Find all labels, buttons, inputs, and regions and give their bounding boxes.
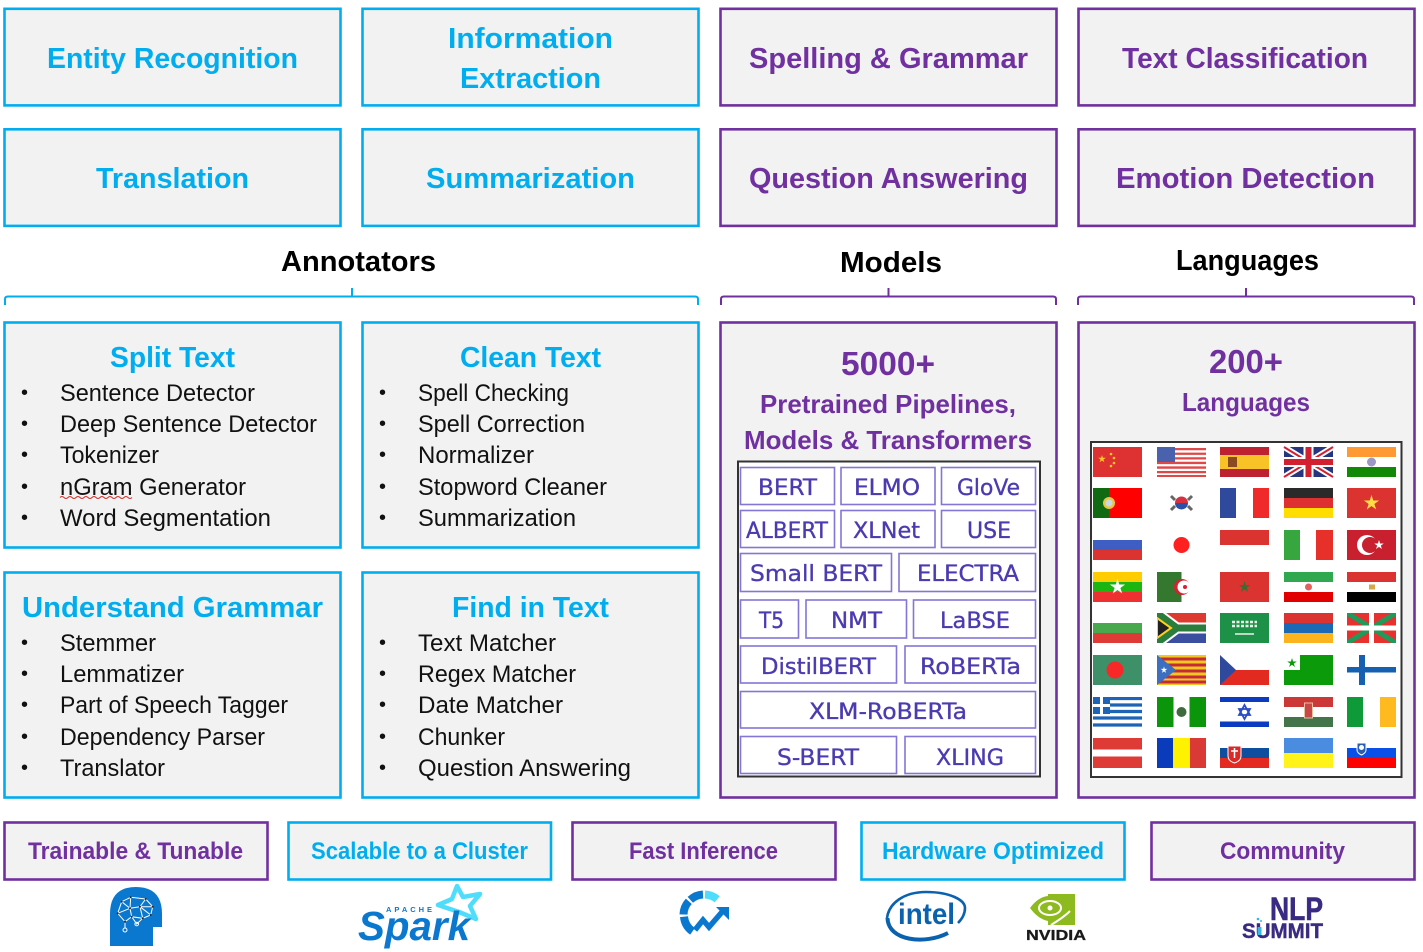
stat: 5000+: 5000+: [841, 345, 935, 382]
panel: Understand Grammar: [4, 572, 340, 798]
flag: Austria: [1093, 738, 1142, 768]
model grid: ALBERT: [746, 519, 829, 544]
heading: Annotators: Annotators: [281, 246, 436, 278]
list: Split Text items: •: [21, 413, 28, 435]
feature box: Fast Inference: [572, 822, 836, 880]
capability box: Question Answering: [720, 129, 1056, 226]
flag: Hungary: [1284, 697, 1333, 727]
model grid: XLM-RoBERTa: [809, 700, 967, 725]
flag: Morocco: [1220, 572, 1269, 602]
icon: NLP Summit logo: NLP: [1270, 891, 1323, 927]
capability box: Summarization: [362, 129, 698, 226]
model grid: RoBERTa: [920, 655, 1021, 680]
capability box: Information Extraction: Extraction: [460, 63, 601, 95]
list: Clean Text items: •: [379, 444, 386, 466]
heading: Languages: Languages: [1176, 245, 1319, 277]
list: Understand Grammar items: Part of Speech Tagger: [60, 692, 288, 719]
list: Find in Text items: •: [379, 726, 386, 748]
list: Find in Text items: •: [379, 757, 386, 779]
model grid: USE: [967, 519, 1011, 544]
flag: India: [1347, 447, 1396, 477]
list: Find in Text items: •: [379, 663, 386, 685]
capability box: Text Classification: [1078, 9, 1414, 105]
feature box: Community: [1152, 822, 1414, 880]
model grid: ELECTRA: [917, 562, 1019, 587]
list: Clean Text items: Spell Correction: [418, 411, 585, 438]
flag: China: [1093, 447, 1142, 477]
stat: 200+: 200+: [1209, 343, 1283, 380]
capability box: Spelling & Grammar: Spelling & Grammar: [749, 43, 1028, 75]
capability box: Question Answering: Question Answering: [749, 163, 1028, 195]
list: Clean Text items: Summarization: [418, 505, 576, 532]
bracket: Languages: [1078, 288, 1414, 305]
flag: Nigeria: [1157, 697, 1206, 727]
feature box: Scalable to a Cluster: Scalable to a Cluster: [311, 838, 528, 865]
list: Find in Text items: Chunker: [418, 724, 505, 751]
list: Understand Grammar items: Dependency Parser: [60, 724, 265, 751]
icon: AI head with neural network: [110, 887, 162, 946]
flag: Ukraine: [1284, 738, 1333, 768]
panel: Find in Text: [362, 572, 698, 798]
flag: Turkey: [1347, 530, 1396, 560]
flag: Basque Country: [1347, 613, 1396, 643]
list: Split Text items: Sentence Detector: [60, 380, 255, 407]
feature box: Community: Community: [1220, 838, 1346, 865]
capability box: Translation: [4, 129, 340, 226]
capability box: Text Classification: Text Classification: [1122, 43, 1368, 75]
list: Clean Text items: •: [379, 413, 386, 435]
icon: Apache Spark logo: Spark: [358, 903, 472, 949]
model grid: XLNet: [853, 519, 920, 544]
subheading: Pretrained Pipelines, Models & Transformers: [744, 389, 1032, 455]
list: Understand Grammar items: •: [21, 694, 28, 716]
flag: Indonesia: [1220, 530, 1269, 560]
list: Understand Grammar items: •: [21, 757, 28, 779]
subheading: Pretrained Pipelines, Models & Transformers: Pretrained Pipelines,: [760, 389, 1016, 419]
list: Split Text items: Tokenizer: [60, 442, 159, 469]
flag: Russia: [1093, 530, 1142, 560]
list: Find in Text items: •: [379, 632, 386, 654]
list: Clean Text items: •: [379, 507, 386, 529]
feature box: Fast Inference: Fast Inference: [629, 838, 778, 865]
subheading: Languages: Languages: [1182, 387, 1310, 417]
subheading: Pretrained Pipelines, Models & Transformers: Models & Transformers: [744, 425, 1032, 455]
list: Clean Text items: Stopword Cleaner: [418, 474, 607, 501]
model grid: BERT: [758, 476, 818, 501]
flag: France: [1220, 488, 1269, 518]
flag: Slovakia: [1220, 738, 1269, 768]
model grid: XLING: [936, 746, 1004, 771]
flag: Bulgaria: [1093, 613, 1142, 643]
icon: Apache Spark logo: APACHE: [386, 905, 432, 914]
panel: Clean Text: [362, 322, 698, 548]
list: Split Text items: •: [21, 444, 28, 466]
flag: Iran: [1284, 572, 1333, 602]
flag: Greece: [1093, 697, 1142, 727]
flag: Egypt: [1347, 572, 1396, 602]
list: Find in Text items: Regex Matcher: [418, 661, 576, 688]
list: Find in Text items: Text Matcher: [418, 630, 556, 657]
icon: NLP Summit logo: SUMMIT: [1242, 920, 1323, 943]
panel: Split Text: [4, 322, 340, 548]
icon: NLP Summit logo: [1242, 891, 1323, 943]
model grid: S-BERT: [777, 746, 860, 771]
model grid: ELMO: [854, 476, 920, 501]
capability box: Summarization: Summarization: [426, 163, 635, 195]
model grid: Small BERT: [750, 562, 883, 587]
flag: Portugal: [1093, 488, 1142, 518]
panel heading: Understand Grammar: Understand Grammar: [22, 592, 323, 624]
list: Split Text items: Deep Sentence Detector: [60, 411, 317, 438]
flag: Vietnam: [1347, 488, 1396, 518]
flag: Myanmar: [1093, 572, 1142, 602]
list: Split Text items: nGram Generator: [60, 474, 246, 501]
flag: South Africa: [1157, 613, 1206, 643]
list: Split Text items: •: [21, 507, 28, 529]
capability box: Emotion Detection: [1078, 129, 1414, 226]
list: Understand Grammar items: Translator: [60, 755, 165, 782]
flag: Romania: [1157, 738, 1206, 768]
model grid: LaBSE: [940, 609, 1010, 634]
flag: Esperanto: [1284, 655, 1333, 685]
capability box: Information Extraction: Information: [448, 23, 613, 55]
flag: UK: [1284, 447, 1333, 477]
list: Understand Grammar items: [21, 630, 288, 782]
list: Find in Text items: Date Matcher: [418, 692, 563, 719]
list: Clean Text items: Spell Checking: [418, 380, 569, 407]
list: Clean Text items: •: [379, 382, 386, 404]
capability box: Information Extraction: [362, 9, 698, 105]
flag: Finland: [1347, 655, 1396, 685]
panel: Models: [720, 322, 1056, 798]
panel: Languages: [1078, 322, 1414, 798]
icon: fast inference gauge with rising arrow: [684, 894, 729, 931]
heading: Models: Models: [840, 247, 942, 279]
flag: Ireland: [1347, 697, 1396, 727]
model grid: NMT: [831, 609, 883, 634]
list: Understand Grammar items: •: [21, 726, 28, 748]
feature box: Trainable & Tunable: Trainable & Tunable: [28, 838, 243, 865]
list: Find in Text items: •: [379, 694, 386, 716]
list: Understand Grammar items: •: [21, 663, 28, 685]
list: Split Text items: Word Segmentation: [60, 505, 271, 532]
capability box: Emotion Detection: Emotion Detection: [1116, 163, 1375, 195]
flag: Saudi Arabia: [1220, 613, 1269, 643]
list: Understand Grammar items: Lemmatizer: [60, 661, 184, 688]
capability box: Entity Recognition: [4, 9, 340, 105]
list: Find in Text items: [379, 630, 631, 782]
panel heading: Find in Text: Find in Text: [452, 592, 609, 624]
list: Find in Text items: Question Answering: [418, 755, 631, 782]
flag: Italy: [1284, 530, 1333, 560]
model grid: DistilBERT: [761, 655, 877, 680]
list: Split Text items: •: [21, 382, 28, 404]
capability box: Spelling & Grammar: [720, 9, 1056, 105]
list: Clean Text items: [379, 380, 607, 532]
list: Understand Grammar items: Stemmer: [60, 630, 156, 657]
icon: Apache Spark logo: [358, 886, 480, 949]
flag: Slovenia: [1347, 738, 1396, 768]
flag: Czech Republic: [1220, 655, 1269, 685]
list: Split Text items: [21, 380, 317, 532]
capability box: Translation: Translation: [96, 163, 249, 195]
model grid: GloVe: [957, 476, 1020, 501]
bracket: Annotators: [5, 288, 698, 305]
flag: Armenia: [1284, 613, 1333, 643]
list: Clean Text items: Normalizer: [418, 442, 534, 469]
flag: USA: [1157, 447, 1206, 477]
list: Split Text items: •: [21, 476, 28, 498]
flag: Israel: [1220, 697, 1269, 727]
flag: South Korea: [1158, 488, 1205, 518]
flag: Japan: [1158, 530, 1205, 560]
flag: Catalonia: [1157, 655, 1206, 685]
panel heading: Clean Text: Clean Text: [460, 342, 601, 374]
model grid: T5: [758, 609, 784, 634]
list: Clean Text items: •: [379, 476, 386, 498]
icon: NVIDIA logo: NVIDIA: [1026, 928, 1087, 944]
panel heading: Split Text: Split Text: [110, 342, 235, 374]
feature box: Trainable & Tunable: [4, 822, 268, 880]
feature box: Hardware Optimized: [862, 822, 1124, 880]
feature box: Hardware Optimized: Hardware Optimized: [882, 838, 1104, 865]
flag: Bangladesh: [1093, 655, 1142, 685]
flag grid: [1091, 442, 1402, 777]
flag: Algeria: [1157, 572, 1206, 602]
icon: NVIDIA logo: [1026, 894, 1087, 944]
icon: Intel logo: [887, 892, 965, 940]
flag: Spain: [1220, 447, 1269, 477]
model grid: [738, 462, 1040, 776]
feature box: Scalable to a Cluster: [288, 822, 551, 880]
list: Understand Grammar items: •: [21, 632, 28, 654]
capability box: Entity Recognition: Entity Recognition: [47, 43, 298, 75]
icon: Intel logo: intel: [898, 898, 955, 931]
bracket: Models: [721, 288, 1056, 305]
flag: Germany: [1284, 488, 1333, 518]
